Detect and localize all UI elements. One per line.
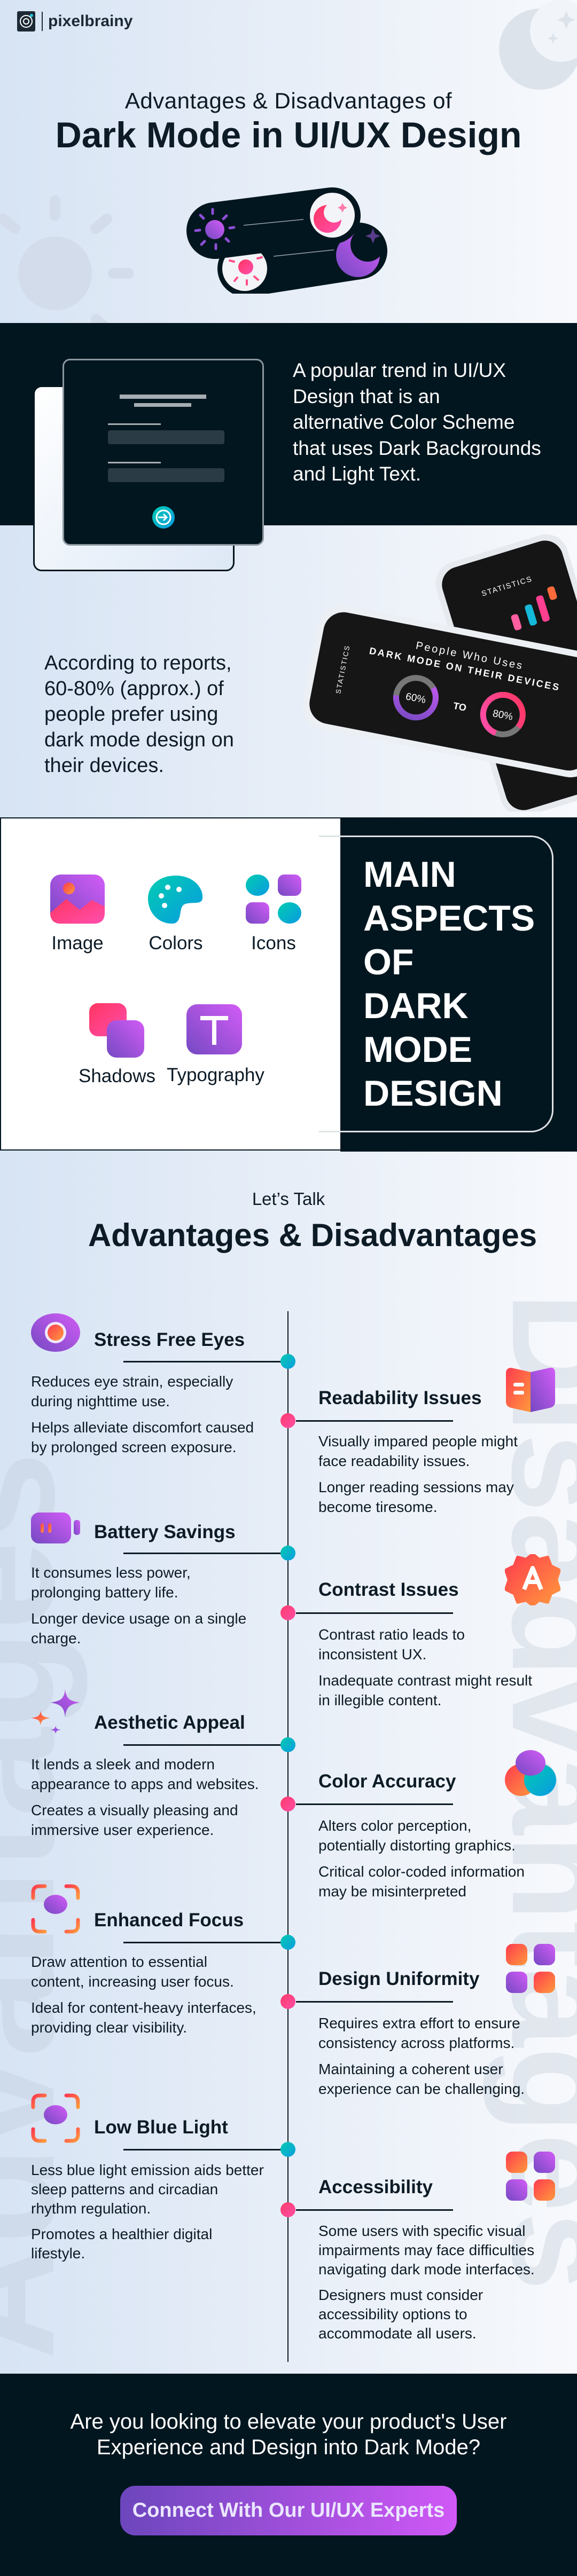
decoration: sun (0, 195, 134, 323)
advantage: stress free eyes: by prolonged screen exposure. (31, 1439, 236, 1455)
disadvantage: readability issues: Longer reading sessions may (318, 1479, 514, 1495)
illustration: login cards (33, 359, 264, 571)
advantage: battery savings: charge. (31, 1630, 81, 1647)
advantage: enhanced focus: Draw attention to essential (31, 1953, 207, 1970)
icon: image: Image (51, 933, 104, 954)
title (56, 88, 521, 155)
illustration: phones with stats: 80% (492, 708, 514, 723)
disadvantage: accessibility: navigating dark mode interfaces. (318, 2261, 535, 2278)
advantage: enhanced focus: Ideal for content-heavy interfaces, (31, 1999, 256, 2016)
icon: typography: Typography (167, 1065, 264, 1085)
panel: main aspects (0, 817, 577, 1151)
icon: sparkles (31, 1689, 80, 1734)
text: statistics: their devices. (44, 754, 164, 777)
text: statistics: dark mode design on (44, 729, 234, 751)
heading: let's talk advantages & disadvantages: Advantages & Disadvantages (88, 1217, 537, 1253)
disadvantage: color accuracy (280, 1750, 556, 1900)
disadvantage: color accuracy: potentially distorting graphics. (318, 1837, 516, 1854)
footer: call to action (0, 2374, 577, 2576)
advantage: low blue light: Low Blue Light (94, 2117, 228, 2138)
text: statistics: 60-80% (approx.) of (44, 678, 224, 700)
icon: icons: Icons (251, 933, 296, 954)
advantage: stress free eyes: during nighttime use. (31, 1393, 170, 1409)
cta button (120, 2486, 457, 2535)
disadvantage: color accuracy: Critical color-coded information (318, 1863, 525, 1880)
logo (17, 11, 132, 31)
text: statistics (44, 652, 234, 777)
advantage: enhanced focus: Enhanced Focus (94, 1910, 244, 1931)
illustration: toggle switches (186, 187, 387, 294)
disadvantage: readability issues: face readability issues. (318, 1453, 470, 1469)
advantage: low blue light: Promotes a healthier digital (31, 2226, 212, 2242)
illustration: phones with stats: TO (453, 700, 467, 713)
text: definition: that uses Dark Backgrounds (293, 437, 541, 459)
disadvantage: accessibility: Some users with specific visual (318, 2223, 525, 2239)
icon: book (506, 1368, 555, 1412)
timeline line (287, 1311, 288, 2362)
disadvantage: contrast issues: Contrast Issues (318, 1579, 459, 1600)
text: definition: and Light Text. (293, 463, 421, 485)
advantage: battery savings: Battery Savings (94, 1522, 236, 1542)
heading: let's talk advantages & disadvantages (88, 1189, 537, 1253)
disadvantage: readability issues (280, 1368, 555, 1515)
disadvantage: accessibility: accommodate all users. (318, 2325, 477, 2342)
advantage: stress free eyes: Stress Free Eyes (94, 1329, 245, 1350)
illustration: phones with stats: People Who Uses (415, 640, 525, 672)
advantage: low blue light (31, 2094, 295, 2262)
illustration: phones with stats: DARK MODE ON THEIR DEVICES (369, 645, 562, 693)
disadvantage: accessibility: Accessibility (318, 2177, 433, 2197)
disadvantage: accessibility (280, 2152, 555, 2342)
icon: typography (167, 1004, 264, 1085)
advantage: battery savings: It consumes less power, (31, 1564, 191, 1581)
text: definition: alternative Color Scheme (293, 411, 514, 433)
advantage: stress free eyes (31, 1313, 295, 1455)
advantage: enhanced focus (31, 1885, 295, 2036)
text: definition: A popular trend in UI/UX (293, 359, 506, 381)
dark side (340, 817, 577, 1152)
icon: grid squares (506, 1944, 555, 1993)
advantage: low blue light: sleep patterns and circadian (31, 2181, 218, 2197)
text: definition (293, 359, 541, 485)
disadvantage: contrast issues: Contrast ratio leads to (318, 1626, 465, 1643)
advantage: stress free eyes: Reduces eye strain, especially (31, 1373, 233, 1390)
disadvantage: design uniformity: Maintaining a coherent user (318, 2061, 503, 2077)
disadvantage: contrast issues: inconsistent UX. (318, 1646, 426, 1663)
disadvantage: readability issues: Readability Issues (318, 1388, 481, 1408)
disadvantage: design uniformity: Design Uniformity (318, 1968, 479, 1989)
advantage: aesthetic appeal: Creates a visually pleasing and (31, 1802, 238, 1818)
disadvantage: accessibility: Designers must consider (318, 2287, 483, 2303)
disadvantage: readability issues: become tiresome. (318, 1499, 438, 1515)
advantage: enhanced focus: content, increasing user focus. (31, 1973, 234, 1990)
disadvantage: design uniformity: consistency across platforms. (318, 2035, 514, 2051)
disadvantage: design uniformity: experience can be challenging. (318, 2081, 525, 2097)
cta text (71, 2410, 506, 2459)
icon: colors: Colors (149, 933, 203, 954)
disadvantage: contrast issues: in illegible content. (318, 1692, 441, 1708)
illustration: phones with stats: STATISTICS (480, 574, 533, 598)
disadvantage: color accuracy: Color Accuracy (318, 1771, 456, 1792)
icon: battery (31, 1512, 80, 1543)
advantage: aesthetic appeal: appearance to apps and websites. (31, 1776, 259, 1792)
icon: shadows (79, 1003, 155, 1086)
icon: icons (246, 875, 301, 954)
advantage: battery savings: prolonging battery life. (31, 1584, 178, 1601)
disadvantage: design uniformity (280, 1944, 555, 2097)
icon: low blue light (31, 2094, 80, 2143)
advantage: aesthetic appeal: Aesthetic Appeal (94, 1712, 245, 1733)
advantage: enhanced focus: providing clear visibility. (31, 2019, 187, 2036)
decoration: moon (499, 9, 577, 90)
disadvantage: design uniformity: Requires extra effort to ensure (318, 2015, 520, 2031)
heading: main aspects (363, 854, 535, 1114)
icon: eye (31, 1313, 80, 1352)
heading: main aspects: MAIN (363, 854, 456, 895)
advantage: aesthetic appeal (31, 1689, 295, 1838)
icon: image (50, 875, 105, 954)
title: Advantages & Disadvantages of (125, 88, 452, 113)
advantage: battery savings (31, 1512, 295, 1647)
illustration: phones with stats: STATISTICS (334, 644, 352, 695)
disadvantage: accessibility: impairments may face difficulties (318, 2242, 534, 2258)
advantage: stress free eyes: Helps alleviate discomfort caused (31, 1419, 254, 1436)
disadvantage: readability issues: Visually impared people might (318, 1433, 518, 1450)
heading: main aspects: OF (363, 942, 414, 982)
heading: main aspects: DARK (363, 986, 468, 1026)
cta text: Experience and Design into Dark Mode? (97, 2436, 480, 2459)
dark band (0, 323, 577, 525)
advantage: low blue light: lifestyle. (31, 2245, 85, 2262)
advantage: aesthetic appeal: immersive user experience. (31, 1822, 214, 1838)
heading: main aspects: DESIGN (363, 1073, 503, 1114)
logo: pixelbrainy (48, 12, 132, 30)
disadvantage: color accuracy: may be misinterpreted (318, 1883, 466, 1900)
icon: shadows: Shadows (79, 1066, 155, 1086)
advantage: low blue light: Less blue light emission aids better (31, 2162, 264, 2178)
disadvantage: accessibility: accessibility options to (318, 2306, 467, 2322)
advantage: low blue light: rhythm regulation. (31, 2200, 151, 2217)
disadvantage: contrast issues (280, 1554, 560, 1708)
text: definition: Design that is an (293, 385, 440, 407)
text: statistics: people prefer using (44, 703, 218, 726)
advantage: battery savings: Longer device usage on a single (31, 1610, 246, 1627)
cta text: Are you looking to elevate your product's User (71, 2410, 506, 2433)
disadvantage: color accuracy: Alters color perception, (318, 1817, 471, 1834)
illustration: phones with stats: 60% (404, 691, 427, 706)
icon: grid squares (506, 2152, 555, 2201)
advantage: aesthetic appeal: It lends a sleek and modern (31, 1756, 215, 1773)
heading: main aspects: ASPECTS (363, 898, 535, 939)
icon: focus (31, 1885, 80, 1934)
icon: colors (148, 876, 203, 954)
icon: color circles (505, 1750, 556, 1796)
illustration: phones with stats (309, 534, 577, 812)
cta button: Connect With Our UI/UX Experts (132, 2499, 445, 2522)
heading: let's talk advantages & disadvantages: Let’s Talk (252, 1189, 325, 1209)
title: Dark Mode in UI/UX Design (56, 115, 521, 155)
disadvantage: contrast issues: Inadequate contrast might result (318, 1672, 532, 1689)
text: statistics: According to reports, (44, 652, 232, 674)
icon: contrast badge (505, 1554, 560, 1605)
heading: main aspects: MODE (363, 1029, 472, 1070)
